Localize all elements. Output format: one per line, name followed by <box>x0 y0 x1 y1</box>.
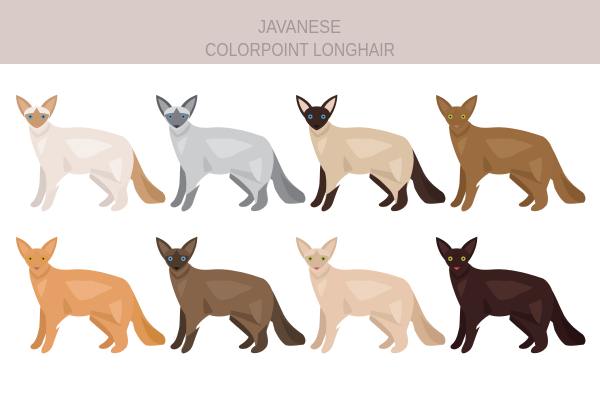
cat: chocolate with blue eyes <box>156 237 305 353</box>
title banner <box>0 0 600 64</box>
title <box>205 17 395 60</box>
cat: dark chocolate <box>436 237 585 353</box>
cat: ginger orange <box>16 237 165 353</box>
cat: pale peach <box>296 237 445 353</box>
cat: silver grey with dark points <box>156 95 305 211</box>
title: COLORPOINT LONGHAIR <box>205 40 395 60</box>
cat: seal colorpoint <box>296 95 445 211</box>
title: JAVANESE <box>258 17 341 37</box>
cat: cream with fawn points <box>16 95 165 211</box>
cat: cinnamon brown <box>436 95 585 211</box>
